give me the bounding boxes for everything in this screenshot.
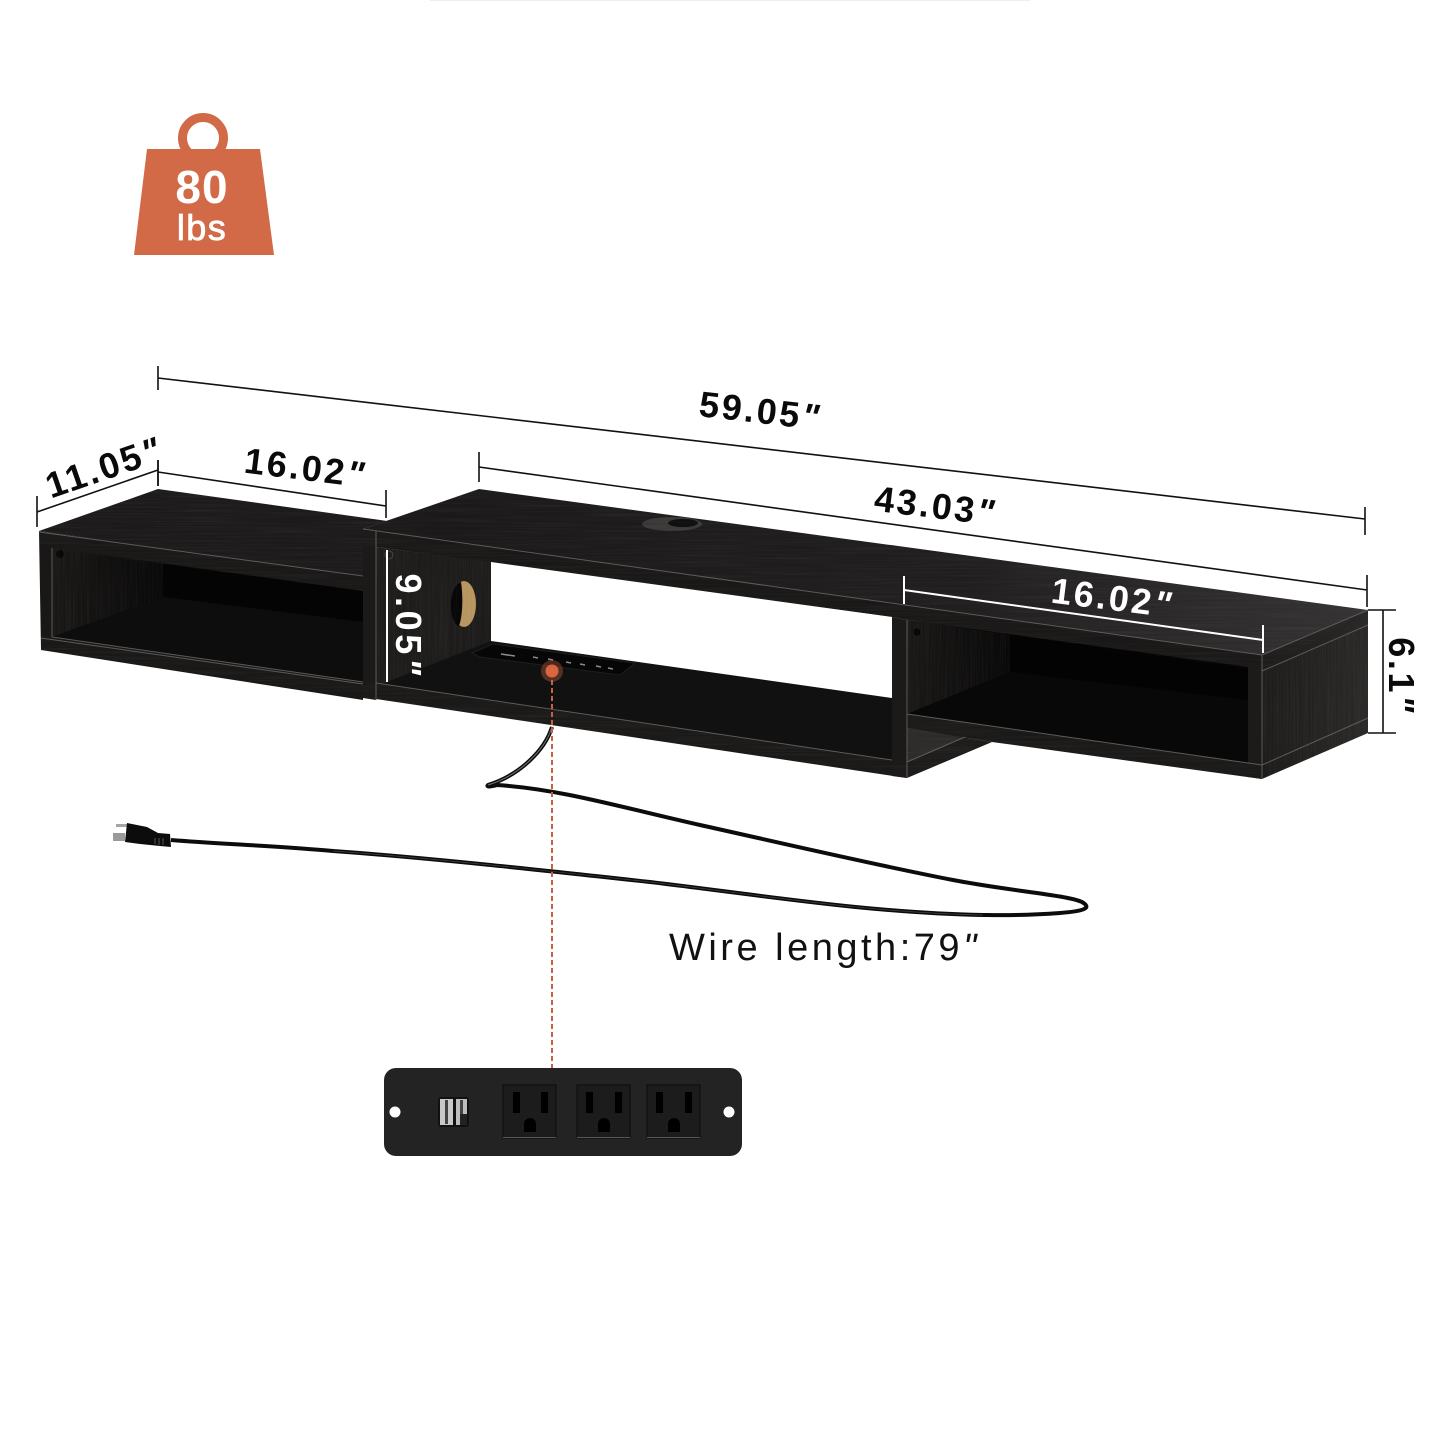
- callout: dashed connector to outlet: [541, 660, 563, 1068]
- icon: USB ports: [438, 1097, 469, 1127]
- right side face: [1262, 610, 1368, 779]
- shelf wood grain overlay: [40, 496, 1354, 755]
- cable hole: [451, 581, 476, 627]
- power cord with plug: [113, 727, 1086, 915]
- dimension: right unit width 16.02: 16.02": [1049, 570, 1176, 625]
- dimension: inner height 9.05: 9.05 ": [388, 573, 429, 679]
- left post: [363, 529, 376, 700]
- icon: 80 lbs weight: lbs: [177, 207, 227, 248]
- top face: [363, 489, 1368, 655]
- centre right post: [892, 617, 907, 778]
- dimension: right unit width 16.02: [904, 570, 1263, 653]
- centre shelf floor: [376, 641, 892, 762]
- dimension: left unit width 16.02: 16.02": [242, 440, 369, 495]
- dimension: centre width 43.03: 43.03": [872, 478, 999, 533]
- icon: outlet 3: [647, 1085, 700, 1138]
- power outlet strip detail: [384, 1068, 742, 1156]
- shelf: left unit: [39, 489, 387, 700]
- upper front fascia: [363, 529, 1262, 671]
- shelf: centre unit with right unit: [363, 489, 1368, 779]
- cable grommet: [642, 517, 702, 531]
- right unit opening: [907, 620, 1248, 763]
- dimension: height 6.1: [1368, 610, 1422, 733]
- icon: outlet 1: [503, 1085, 556, 1138]
- dimension: overall width 59.05: [158, 366, 1365, 535]
- icon: plug: [113, 823, 171, 847]
- white see-through window: [491, 562, 892, 698]
- centre lower fascia: [376, 683, 907, 778]
- icon: 80 lbs weight: [134, 118, 274, 255]
- power strip on shelf: [472, 644, 635, 675]
- wire length label: Wire length:79": [669, 927, 980, 969]
- icon: 80 lbs weight: 80: [175, 161, 229, 213]
- dimension: centre width 43.03: [479, 452, 1367, 607]
- dimension: height 6.1: 6.1 ": [1381, 637, 1422, 715]
- dimension: overall width 59.05: 59.05": [697, 383, 824, 438]
- interior side panel: [376, 547, 491, 686]
- icon: outlet 2: [577, 1085, 630, 1138]
- right unit frame: [1248, 667, 1262, 779]
- dimension: left unit width 16.02: [158, 440, 386, 518]
- dimension: depth 11.05: 11.05": [40, 428, 168, 506]
- infographic: shelf dimensions: [36, 0, 1414, 1156]
- gap side piece: [907, 728, 992, 778]
